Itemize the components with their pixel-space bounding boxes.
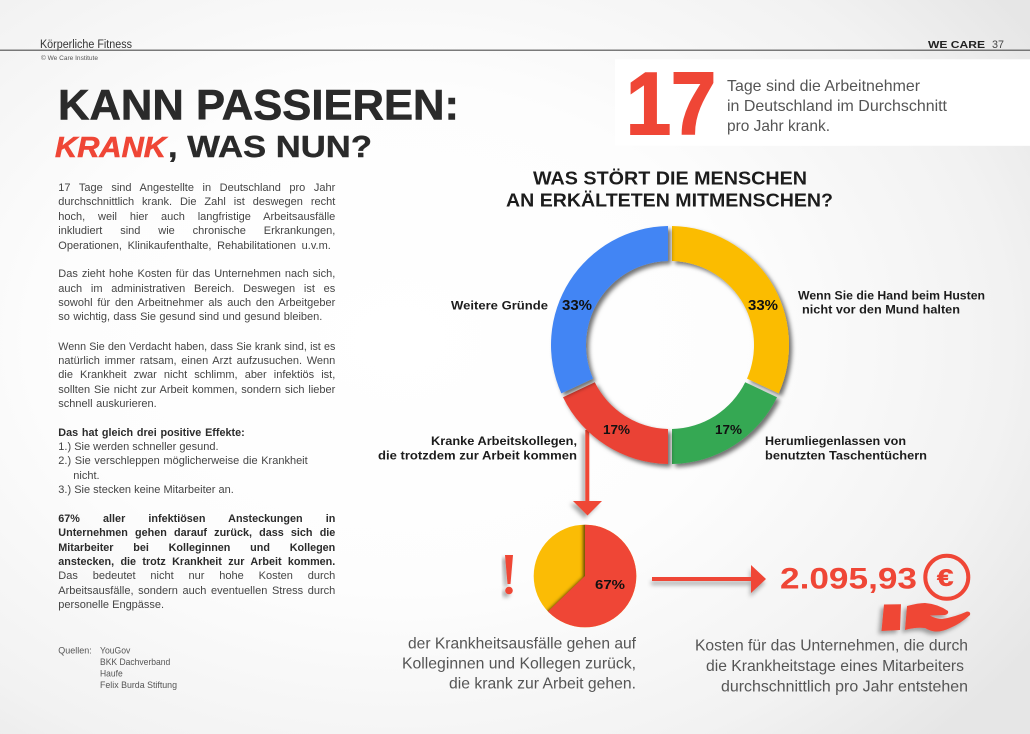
caption: costs: durchschnittlich pro Jahr entstehen — [721, 679, 968, 696]
pie value: 67% — [595, 577, 625, 592]
text block: positive effects: Das hat gleich drei positive Effekte: — [58, 427, 245, 439]
sources list — [100, 644, 177, 690]
caption: costs — [695, 638, 968, 696]
text block: positive effects: 3.) Sie stecken keine Mitarbeiter an. — [58, 484, 234, 496]
pie slice: red 67% — [546, 524, 636, 628]
caption: pie: die krank zur Arbeit gehen. — [449, 676, 636, 692]
label: used tissues: Herumliegenlassen von — [765, 436, 906, 448]
text block: intro: 17 Tage sind Angestellte in Deutschland pro Jahr — [58, 182, 335, 194]
text block: advice: natürlich immer ratsam, einen Arzt aufzusuchen. Wenn — [58, 355, 335, 367]
text block: positive effects: nicht. — [73, 470, 100, 482]
euro sign: € — [937, 565, 954, 592]
pie chart 67% — [534, 524, 636, 628]
text block: intro — [58, 182, 336, 252]
text block: costs: sowohl für den Arbeitnehmer als auch den Arbeitgeber — [58, 297, 335, 309]
sources list: Haufe — [100, 668, 123, 679]
sources list: Felix Burda Stiftung — [100, 679, 177, 690]
copyright note: © We Care Institute — [41, 54, 98, 62]
label: used tissues — [765, 436, 927, 462]
callout text: pro Jahr krank. — [727, 118, 830, 135]
caption: pie: der Krankheitsausfälle gehen auf — [408, 636, 637, 652]
donut chart — [551, 226, 789, 464]
title line 1: KANN PASSIEREN: — [58, 82, 459, 130]
main title — [55, 82, 459, 164]
text block: costs: Das zieht hohe Kosten für das Unternehmen nach sich, — [58, 268, 335, 280]
label: Weitere Gründe: Weitere Gründe — [451, 300, 548, 312]
text block: advice: Wenn Sie den Verdacht haben, dass Sie krank sind, ist es — [58, 341, 335, 353]
text block: costs: so wichtig, dass Sie gesund sind und gesund bleiben. — [58, 311, 322, 323]
text block: infections: Arbeitsausfälle, sondern auch eventuellen Stress durch — [58, 585, 335, 597]
chart heading: WAS STÖRT DIE MENSCHEN — [533, 167, 807, 188]
text block: intro: durchschnittlich krank. Die Zahl ist deswegen recht — [58, 196, 335, 208]
label: hand when coughing: Wenn Sie die Hand beim Husten — [798, 290, 985, 302]
text block: positive effects: 2.) Sie verschleppen möglicherweise die Krankheit — [58, 455, 308, 467]
text block: advice — [58, 341, 336, 410]
text block: advice: die Krankheit zwar nicht schlimm, aber infektiös ist, — [58, 369, 335, 381]
text block: infections: personelle Engpässe. — [58, 599, 164, 611]
coin ring — [925, 556, 968, 599]
chart heading — [506, 167, 833, 211]
arrow: from red segment to pie — [573, 430, 602, 516]
callout text: in Deutschland im Durchschnitt — [727, 98, 948, 115]
text block: positive effects: 1.) Sie werden schneller gesund. — [58, 441, 219, 453]
value labels: 17% — [603, 422, 630, 437]
text block: infections: Unternehmen gehen darauf zurück, dass sich die — [58, 527, 335, 539]
segment: red 17% — [563, 382, 668, 464]
label: hand when coughing: nicht vor den Mund halten — [802, 305, 960, 317]
chart heading: AN ERKÄLTETEN MITMENSCHEN? — [506, 190, 833, 211]
segment: yellow 33% — [672, 226, 789, 393]
label: used tissues: benutzten Taschentüchern — [765, 450, 927, 462]
label: sick colleagues — [378, 436, 577, 462]
text block: infections: Das bedeutet nicht nur hohe Kosten durch — [58, 570, 335, 582]
sources label: Quellen: — [58, 644, 92, 656]
text block: costs: auch im administrativen Bereich. Deswegen ist es — [58, 283, 335, 295]
segment: blue 33% — [551, 226, 668, 393]
sources list: BKK Dachverband — [100, 656, 170, 667]
text block: infections — [58, 513, 335, 611]
header section name: Körperliche Fitness — [40, 39, 132, 51]
value labels: 33% — [748, 298, 778, 314]
text block: intro: Operationen, Klinikaufenthalte, Rehabilitationen u.v.m. — [58, 240, 331, 252]
caption: pie — [402, 636, 637, 692]
callout panel — [615, 59, 1030, 146]
value labels: 33% — [562, 298, 592, 314]
header brand: WE CARE — [928, 39, 985, 51]
label: hand when coughing — [798, 290, 985, 317]
cost figure: 2.095,93 — [780, 562, 917, 595]
callout text: Tage sind die Arbeitnehmer — [727, 78, 921, 95]
header rule — [0, 50, 1030, 51]
callout text — [727, 78, 948, 135]
title line 2: , WAS NUN? — [168, 129, 372, 164]
value labels: 17% — [715, 422, 742, 437]
caption: costs: Kosten für das Unternehmen, die durch — [695, 638, 968, 655]
text block: advice: schnell auskurieren. — [58, 398, 157, 410]
page number: 37 — [992, 39, 1004, 51]
caption: pie: Kolleginnen und Kollegen zurück, — [402, 656, 636, 672]
callout number: 17 — [626, 54, 716, 153]
text block: advice: sollten Sie nicht zur Arbeit kommen, sondern sich lieber — [58, 384, 335, 396]
sources list: YouGov — [100, 644, 131, 656]
text block: intro: hoch, weil hier auch langfristige Arbeitsausfälle — [58, 211, 335, 223]
text block: infections: anstecken, die trotz Krankheit zur Arbeit kommen. — [58, 556, 335, 568]
value labels — [562, 298, 778, 437]
icon: euro coin in hand — [882, 556, 970, 632]
text block: costs — [58, 268, 336, 323]
text block: infections: 67% aller infektiösen Ansteckungen in — [58, 513, 335, 525]
segment: green 17% — [672, 382, 777, 464]
text block: positive effects — [58, 427, 308, 496]
text block: intro: inkludiert sind wie chronische Erkrankungen, — [58, 225, 335, 237]
label: sick colleagues: Kranke Arbeitskollegen, — [431, 436, 577, 448]
label: sick colleagues: die trotzdem zur Arbeit kommen — [378, 450, 577, 462]
pie base: yellow — [534, 525, 636, 627]
hand — [882, 603, 970, 632]
title highlighted word: KRANK — [55, 132, 168, 164]
arrow: pie to costs — [652, 565, 766, 593]
text block: infections: Mitarbeiter bei Kolleginnen und Kollegen — [58, 542, 335, 554]
icon: exclamation mark — [505, 555, 513, 594]
caption: costs: die Krankheitstage eines Mitarbeiters — [706, 658, 964, 675]
callout: 17 days — [615, 54, 1030, 153]
